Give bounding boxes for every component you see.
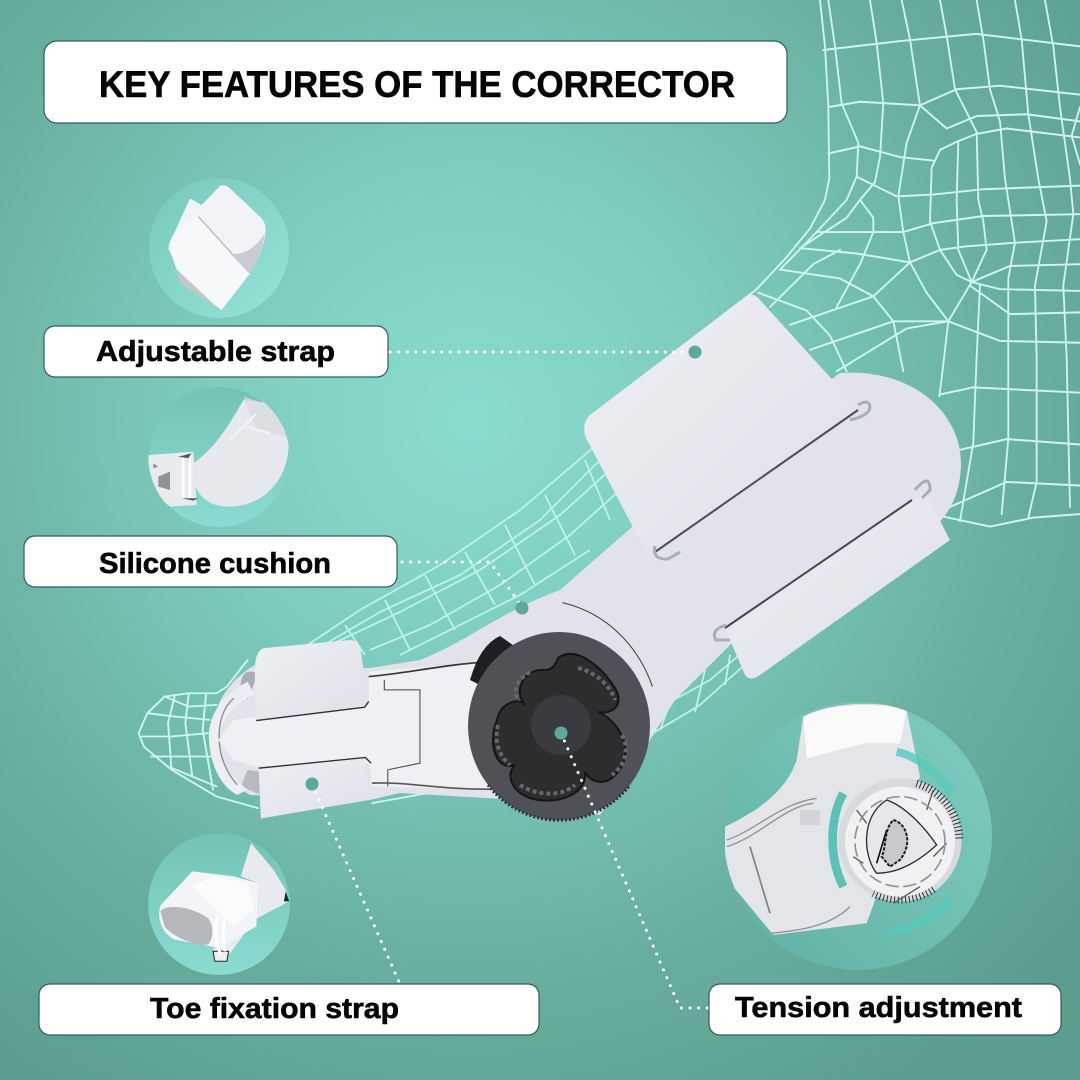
dotted leader: tension adjustment <box>561 733 708 1008</box>
forefoot assembly <box>209 603 652 818</box>
callout pin: tension adjustment <box>554 726 568 740</box>
toe fixation strap <box>259 757 370 818</box>
wireframe foot mesh: midfoot <box>300 442 750 735</box>
dotted leader: adjustable strap <box>390 350 690 354</box>
wireframe foot mesh: toe <box>139 660 493 808</box>
label: adjustable strap <box>44 326 388 377</box>
callout pin: toe fixation strap <box>306 778 318 790</box>
ankle strap <box>584 295 870 559</box>
label: toe fixation strap: Toe fixation strap <box>150 993 399 1025</box>
label: toe fixation strap <box>39 984 539 1035</box>
label: silicone cushion <box>24 536 397 587</box>
label: adjustable strap: Adjustable strap <box>96 336 335 368</box>
toe top strap <box>255 640 369 721</box>
corrector device <box>209 295 961 820</box>
thumbnail: tension adjustment <box>724 702 992 970</box>
label: tension adjustment: Tension adjustment <box>735 992 1022 1024</box>
tension wheel <box>468 632 650 820</box>
thumbnail: toe fixation strap <box>148 833 290 975</box>
title box <box>44 41 787 123</box>
dotted leader: toe fixation strap <box>312 784 400 984</box>
thumbnail: adjustable strap <box>149 178 289 318</box>
device main plate <box>213 373 961 815</box>
label: tension adjustment <box>709 984 1061 1035</box>
wireframe foot mesh: ankle and heel <box>733 0 1080 527</box>
dotted leader: silicone cushion <box>402 562 520 604</box>
thumbnail: silicone cushion <box>148 387 289 527</box>
title text: KEY FEATURES OF THE CORRECTOR <box>99 64 735 105</box>
callout pin: adjustable strap <box>688 346 702 358</box>
callout pin: silicone cushion <box>516 602 528 614</box>
label: silicone cushion: Silicone cushion <box>99 548 331 580</box>
midfoot strap <box>714 481 950 678</box>
